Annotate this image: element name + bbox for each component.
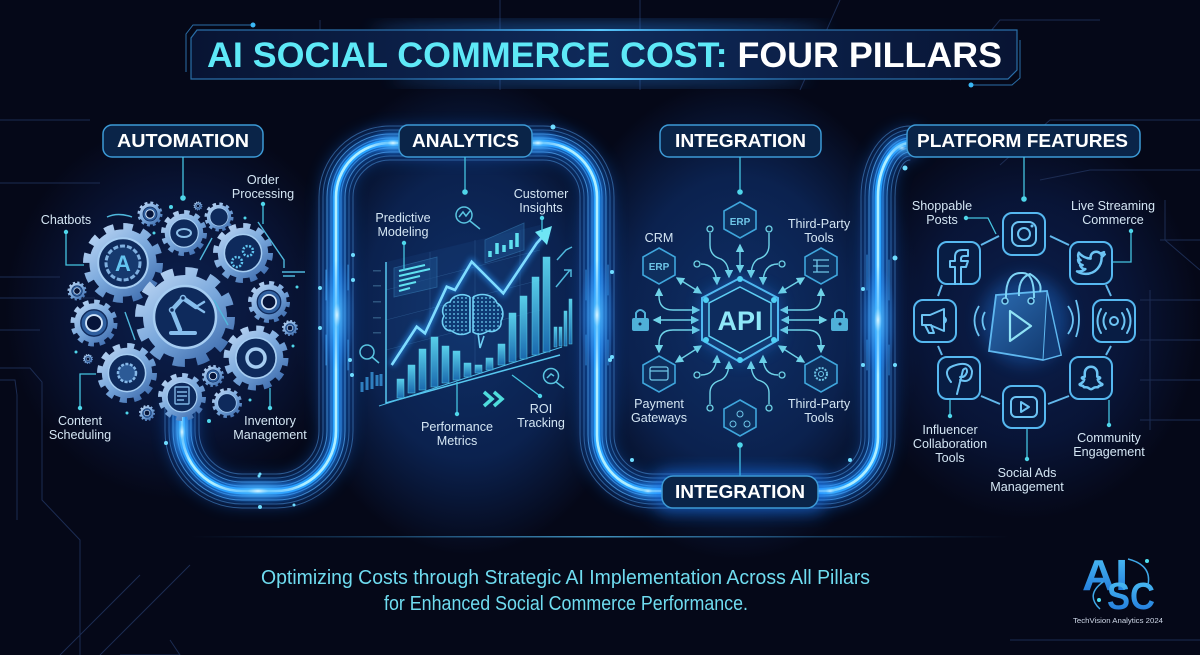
icon: small trend arrows (556, 247, 572, 287)
glowing connector pipe (164, 124, 922, 509)
arrows to api hub (654, 226, 826, 411)
node: top erp (724, 202, 756, 238)
label: influencer collaboration tools: Influencer (922, 423, 978, 437)
pillar: platform features (907, 125, 1155, 494)
heading pill: platform features: PLATFORM FEATURES (917, 131, 1128, 151)
logo (1073, 551, 1163, 625)
icon tile: facebook (938, 242, 980, 284)
label: shoppable posts: Shoppable (912, 199, 972, 213)
logo: SC (1107, 576, 1155, 618)
title text: AI SOCIAL COMMERCE COST: FOUR PILLARS (207, 36, 1002, 75)
icon: robot arm (170, 296, 204, 333)
label: third-party tools upper (788, 217, 851, 245)
label: inventory management: Management (233, 428, 307, 442)
label: live streaming commerce (1071, 199, 1155, 262)
label: third-party tools lower: Third-Party (788, 397, 851, 411)
label: influencer collaboration tools: Tools (935, 451, 965, 465)
icon tile: snapchat (1070, 357, 1112, 399)
icon: chevrons (484, 392, 502, 406)
footer tagline: Optimizing Costs through Strategic AI Implementation Across All Pillars (261, 567, 870, 589)
label: social ads management: Social Ads (998, 466, 1056, 480)
icon: scheduling gear (118, 364, 136, 382)
heading pill: integration top: INTEGRATION (675, 131, 806, 151)
icon: magnifier top (456, 207, 480, 229)
icon: left lock (632, 310, 649, 331)
label: payment gateways: Payment (634, 397, 684, 411)
label: customer insights (514, 187, 568, 232)
ring segments (938, 236, 1111, 404)
api hub (702, 276, 778, 363)
label: customer insights: Customer (514, 187, 568, 201)
heading pill: automation (103, 125, 263, 157)
icon tile: instagram (1003, 213, 1045, 255)
label: inventory management (233, 388, 307, 442)
trend arrow (392, 226, 552, 365)
label: live streaming commerce: Commerce (1082, 213, 1144, 227)
label: third-party tools lower (788, 397, 851, 425)
pillar: analytics (360, 125, 572, 448)
logo: TechVision Analytics 2024 (1073, 616, 1163, 625)
heading pill: analytics (399, 125, 532, 157)
icon: letter A gear: A (115, 251, 131, 276)
icon: magnifier bottom (544, 368, 564, 388)
icon: top gear eye (177, 229, 191, 237)
label: social ads management: Management (990, 480, 1064, 494)
connector: platform (1021, 157, 1027, 202)
label: content scheduling: Content (58, 414, 103, 428)
pillar: automation (41, 125, 307, 442)
icon: shopping bag with play (981, 273, 1069, 364)
node: top erp: ERP (730, 217, 751, 228)
scattered nodes (74, 205, 298, 423)
icon: signal waves (974, 300, 1079, 337)
icon: processing gears (232, 246, 253, 267)
label: roi tracking (512, 375, 565, 430)
icon tile: pinterest (938, 357, 980, 399)
icon tile: broadcast (1093, 300, 1135, 342)
label: inventory management: Inventory (244, 414, 297, 428)
node: bottom network (724, 400, 756, 436)
label: chatbots (41, 213, 91, 265)
label: chatbots: Chatbots (41, 213, 91, 227)
axis ticks (373, 270, 381, 334)
label: shoppable posts (912, 199, 996, 234)
node: third-party tools upper (805, 248, 837, 284)
label: crm: CRM (645, 231, 673, 245)
icon tile: youtube (1003, 386, 1045, 428)
label: roi tracking: Tracking (517, 416, 565, 430)
icon: document (175, 387, 189, 404)
connector: integration bottom (737, 442, 743, 476)
panel: predictive list (394, 257, 437, 297)
label: customer insights: Insights (519, 201, 563, 215)
label: predictive modeling: Modeling (377, 225, 429, 239)
icon: letter A gear (106, 246, 140, 280)
footer tagline (261, 567, 870, 615)
label: community engagement: Engagement (1073, 445, 1145, 459)
node: payment gateways (643, 356, 675, 392)
icon: magnifier left (360, 345, 379, 363)
footer divider (190, 536, 1010, 538)
label: performance metrics: Performance (421, 420, 493, 434)
label: live streaming commerce: Live Streaming (1071, 199, 1155, 213)
label: social ads management (990, 429, 1064, 494)
node: crm erp: ERP (649, 262, 670, 273)
label: influencer collaboration tools: Collaboration (913, 437, 987, 451)
node: crm erp (643, 248, 675, 284)
label: payment gateways: Gateways (631, 411, 687, 425)
label: payment gateways (631, 397, 687, 425)
connector: automation (180, 157, 186, 201)
icon tile: twitter (1070, 242, 1112, 284)
label: third-party tools upper: Third-Party (788, 217, 851, 231)
label: performance metrics: Metrics (437, 434, 477, 448)
label: influencer collaboration tools (913, 400, 987, 465)
icon: mini bars left (362, 372, 381, 392)
label: third-party tools lower: Tools (804, 411, 834, 425)
title banner (186, 22, 1020, 88)
heading pill: integration bottom: INTEGRATION (675, 482, 805, 502)
label: predictive modeling (375, 211, 431, 270)
icon: brain (442, 294, 504, 348)
icon: inventory gear (247, 349, 265, 367)
label: shoppable posts: Posts (926, 213, 958, 227)
heading pill: integration top (660, 125, 821, 157)
label: performance metrics (421, 382, 493, 448)
label: order processing: Processing (232, 187, 294, 201)
gear cluster (68, 202, 305, 423)
logo: AI (1082, 551, 1128, 600)
icon: right lock (831, 310, 848, 331)
label: predictive modeling: Predictive (375, 211, 431, 225)
icon tile: megaphone (914, 300, 956, 342)
connector: integration top (737, 157, 743, 195)
bars (397, 257, 572, 398)
connector: analytics (462, 157, 468, 195)
chart: growth bars and trend (373, 223, 572, 406)
label: roi tracking: ROI (530, 402, 552, 416)
footer tagline: for Enhanced Social Commerce Performance. (384, 593, 748, 615)
pillar: integration (631, 125, 851, 514)
panel: mini bar chart (485, 223, 524, 263)
label: third-party tools upper: Tools (804, 231, 834, 245)
heading pill: platform features (907, 125, 1140, 157)
label: content scheduling (49, 374, 111, 442)
heading pill: integration bottom (655, 470, 825, 514)
api hub: API (717, 306, 763, 336)
label: community engagement (1073, 400, 1145, 459)
heading pill: automation: AUTOMATION (117, 131, 249, 151)
label: order processing (232, 173, 294, 224)
label: community engagement: Community (1077, 431, 1142, 445)
label: order processing: Order (247, 173, 279, 187)
label: content scheduling: Scheduling (49, 428, 111, 442)
heading pill: analytics: ANALYTICS (412, 131, 519, 151)
node: third-party tools lower (805, 356, 837, 392)
